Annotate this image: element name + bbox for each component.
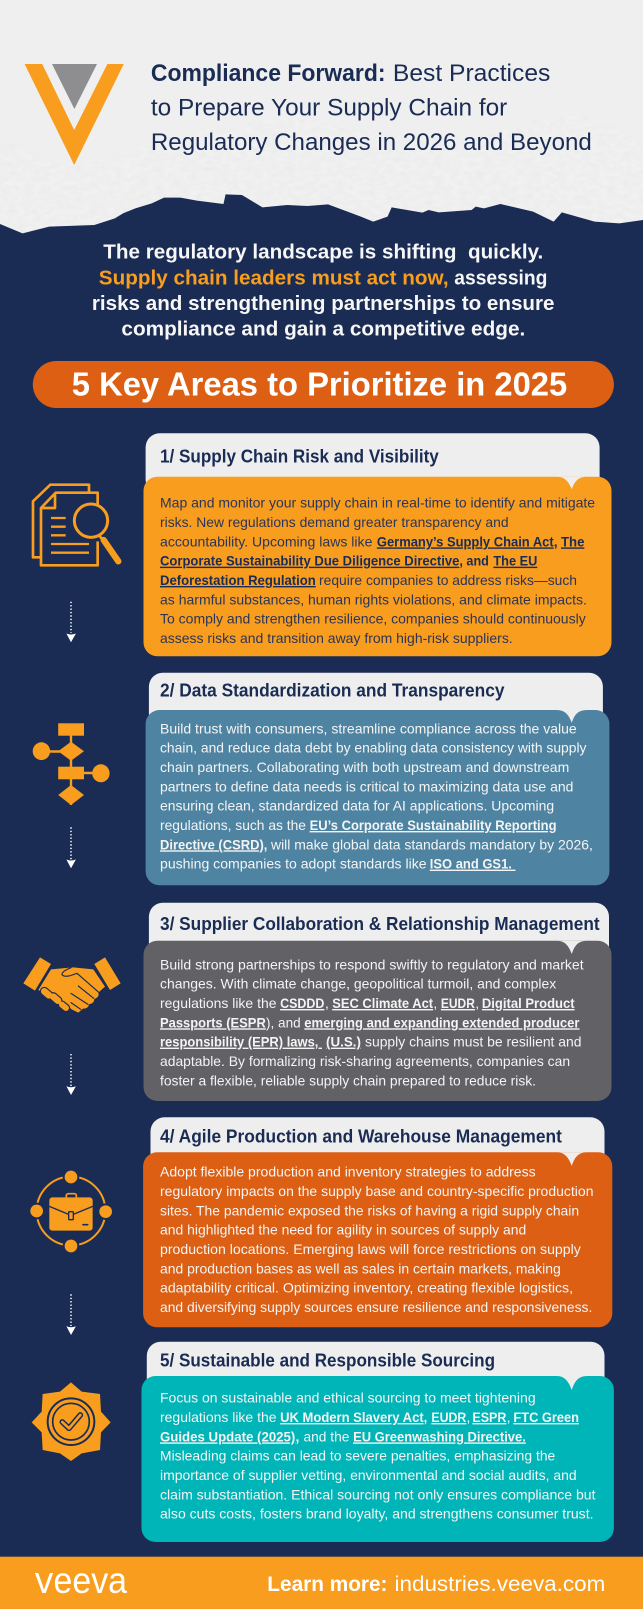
- body text 2: regulations, such as the: [160, 817, 306, 833]
- icon: document with magnifier: [33, 485, 118, 565]
- body text 3: (U.S.): [326, 1034, 361, 1050]
- body text 3: [160, 956, 584, 1088]
- panel body 3: [144, 941, 612, 1101]
- body text 2: ISO and GS1.: [430, 856, 516, 872]
- body text 3: SEC Climate Act: [332, 995, 433, 1011]
- body text 5: EUDR: [431, 1409, 466, 1425]
- heading 4: 4/ Agile Production and Warehouse Management: [160, 1126, 562, 1147]
- header background: torn paper: [0, 0, 643, 240]
- panel: 5 sustainable sourcing: [142, 1342, 614, 1542]
- body text 1: To comply and strengthen resilience, companies should continuously: [160, 611, 586, 627]
- body text 4: production locations. Emerging laws will force restrictions on supply: [160, 1241, 581, 1257]
- footer link: learn more: industries.veeva.com: [394, 1572, 605, 1596]
- body text 3: adaptable. By formalizing risk-sharing agreements, companies can: [160, 1053, 570, 1069]
- panel body 1: [144, 477, 612, 656]
- body text 5: ,: [466, 1409, 470, 1425]
- banner: 5 key areas: 5 Key Areas to Prioritize in 2025: [72, 367, 567, 404]
- body text 3: supply chains must be resilient and: [365, 1034, 582, 1050]
- body text 3: changes. With climate change, geopolitical turmoil, and complex: [160, 976, 556, 992]
- arrow 1: [66, 602, 76, 642]
- body text 3: ), and: [266, 1014, 301, 1030]
- heading 3: 3/ Supplier Collaboration & Relationship Management: [160, 913, 600, 934]
- body text 5: UK Modern Slavery Act,: [280, 1409, 427, 1425]
- body text 1: Germany’s Supply Chain Act: [377, 533, 554, 549]
- body text 2: will make global data standards mandatory by 2026,: [270, 836, 593, 852]
- title: to Prepare Your Supply Chain for: [151, 95, 507, 122]
- body text 5: claim substantiation. Ethical sourcing not only ensures compliance but: [160, 1486, 596, 1502]
- panel header 1: [146, 433, 600, 493]
- body text 4: sites. The pandemic exposed the risks of having a rigid supply chain: [160, 1202, 579, 1218]
- panel body 5: [142, 1376, 614, 1542]
- body text 5: regulations like the: [160, 1409, 277, 1425]
- body text 3: ,: [475, 995, 479, 1011]
- panel header 5: [147, 1342, 605, 1397]
- body text 5: EU Greenwashing Directive.: [353, 1428, 526, 1444]
- body text 5: ESPR: [472, 1409, 506, 1425]
- panel header 3: [149, 903, 609, 963]
- body text 3: Build strong partnerships to respond swiftly to regulatory and market: [160, 956, 584, 972]
- body text 4: [160, 1164, 594, 1315]
- body text 2: pushing companies to adopt standards like: [160, 856, 427, 872]
- body text 4: and diversifying supply sources ensure resilience and responsiveness.: [160, 1299, 592, 1315]
- title: Regulatory Changes in 2026 and Beyond: [151, 129, 592, 156]
- icon: handshake: [23, 957, 121, 1013]
- body text 3: CSDDD: [280, 995, 324, 1011]
- intro text: [92, 241, 555, 341]
- body text 5: ,: [296, 1428, 299, 1444]
- body text 2: [160, 720, 593, 872]
- body text 1: require companies to address risks—such: [319, 572, 577, 588]
- body text 4: and production bases as well as sales in certain markets, making: [160, 1260, 561, 1276]
- intro text: assessing: [454, 267, 547, 289]
- body text 2: chain, and reduce data debt by enabling data consistency with supply: [160, 740, 586, 756]
- body text 5: Guides Update (2025): [160, 1428, 295, 1444]
- footer bar: [0, 1557, 643, 1609]
- body text 1: Corporate Sustainability Due Diligence Directive: [160, 553, 460, 569]
- body text 2: chain partners. Collaborating with both upstream and downstream: [160, 759, 569, 775]
- body text 1: accountability. Upcoming laws like: [160, 533, 373, 549]
- body text 5: also cuts costs, fosters brand loyalty, and strengthens consumer trust.: [160, 1506, 594, 1522]
- panel header 4: [150, 1117, 604, 1172]
- body text 1: The EU: [493, 553, 537, 569]
- panel body 2: [146, 710, 609, 885]
- panel header 2: [149, 673, 603, 728]
- body text 2: EU’s Corporate Sustainability Reporting: [310, 817, 556, 833]
- body text 1: as harmful substances, human rights violations, and climate impacts.: [160, 591, 587, 607]
- body text 3: foster a flexible, reliable supply chain prepared to reduce risk.: [160, 1072, 536, 1088]
- body text 3: ,: [433, 995, 437, 1011]
- body text 3: regulations like the: [160, 995, 277, 1011]
- body text 5: and the: [304, 1428, 350, 1444]
- arrow 4: [66, 1294, 76, 1335]
- body text 1: assess risks and transition away from high-risk suppliers.: [160, 630, 513, 646]
- panel: 2 data standardization and transparency: [146, 673, 609, 885]
- icon: flowchart: [33, 723, 110, 805]
- body text 1: [160, 495, 595, 646]
- icon: briefcase in cycle: [30, 1171, 112, 1252]
- heading 1: 1/ Supply Chain Risk and Visibility: [160, 445, 440, 466]
- body text 4: adaptability critical. Optimizing inventory, creating flexible logistics,: [160, 1280, 573, 1296]
- footer logo: Veeva: Veeva: [33, 1560, 127, 1601]
- heading 5: 5/ Sustainable and Responsible Sourcing: [160, 1350, 495, 1371]
- footer link: learn more: [267, 1572, 605, 1596]
- body text 5: FTC Green: [513, 1409, 579, 1425]
- body text 5: ,: [507, 1409, 510, 1425]
- intro text: The regulatory landscape is shifting quickly.: [103, 241, 543, 263]
- title: [151, 60, 592, 156]
- body text 1: Map and monitor your supply chain in real-time to identify and mitigate: [160, 495, 595, 511]
- panel: 1 supply chain risk and visibility: [144, 433, 612, 656]
- icon: quality badge with check: [32, 1382, 111, 1461]
- body text 5: [160, 1390, 596, 1522]
- heading 2: 2/ Data Standardization and Transparency: [160, 680, 505, 701]
- arrow 2: [66, 827, 76, 868]
- body text 2: Build trust with consumers, streamline compliance across the value: [160, 720, 577, 736]
- body text 3: emerging and expanding extended producer: [304, 1014, 580, 1030]
- body text 2: ensuring clean, standardized data for AI applications. Upcoming: [160, 798, 554, 814]
- intro text: compliance and gain a competitive edge.: [121, 319, 525, 341]
- icon: Veeva V logo: [25, 64, 124, 165]
- title: Best Practices: [393, 60, 550, 87]
- arrow 3: [66, 1054, 76, 1095]
- body text 3: Passports (ESPR: [160, 1014, 266, 1030]
- title: Compliance Forward:: [151, 60, 386, 87]
- body text 1: , and: [459, 553, 489, 569]
- body text 3: Digital Product: [482, 995, 575, 1011]
- body text 3: responsibility (EPR) laws,: [160, 1034, 322, 1050]
- footer link: learn more: Learn more:: [267, 1572, 388, 1596]
- intro text: Supply chain leaders must act now,: [99, 267, 449, 289]
- banner: 5 key areas: [33, 361, 614, 408]
- body text 1: ,: [554, 533, 558, 549]
- body text 4: regulatory impacts on the supply base and country-specific production: [160, 1183, 594, 1199]
- body text 3: EUDR: [441, 995, 475, 1011]
- body text 5: Focus on sustainable and ethical sourcing to meet tightening: [160, 1390, 536, 1406]
- body text 5: Misleading claims can lead to severe penalties, emphasizing the: [160, 1448, 555, 1464]
- panel: 4 agile production: [143, 1117, 612, 1327]
- body text 1: The: [561, 533, 585, 549]
- body text 1: Deforestation Regulation: [160, 572, 316, 588]
- panel: 3 supplier collaboration: [144, 903, 612, 1101]
- body text 3: ,: [325, 995, 329, 1011]
- body text 4: Adopt flexible production and inventory strategies to address: [160, 1164, 536, 1180]
- panel body 4: [143, 1152, 612, 1327]
- body text 2: Directive (CSRD),: [160, 836, 267, 852]
- body text 1: risks. New regulations demand greater transparency and: [160, 514, 509, 530]
- body text 4: and highlighted the need for agility in sources of supply and: [160, 1222, 526, 1238]
- body text 2: partners to define data needs is critical to maximizing data use and: [160, 778, 573, 794]
- body text 5: importance of supplier vetting, environmental and social audits, and: [160, 1467, 577, 1483]
- intro text: risks and strengthening partnerships to ensure: [92, 293, 555, 315]
